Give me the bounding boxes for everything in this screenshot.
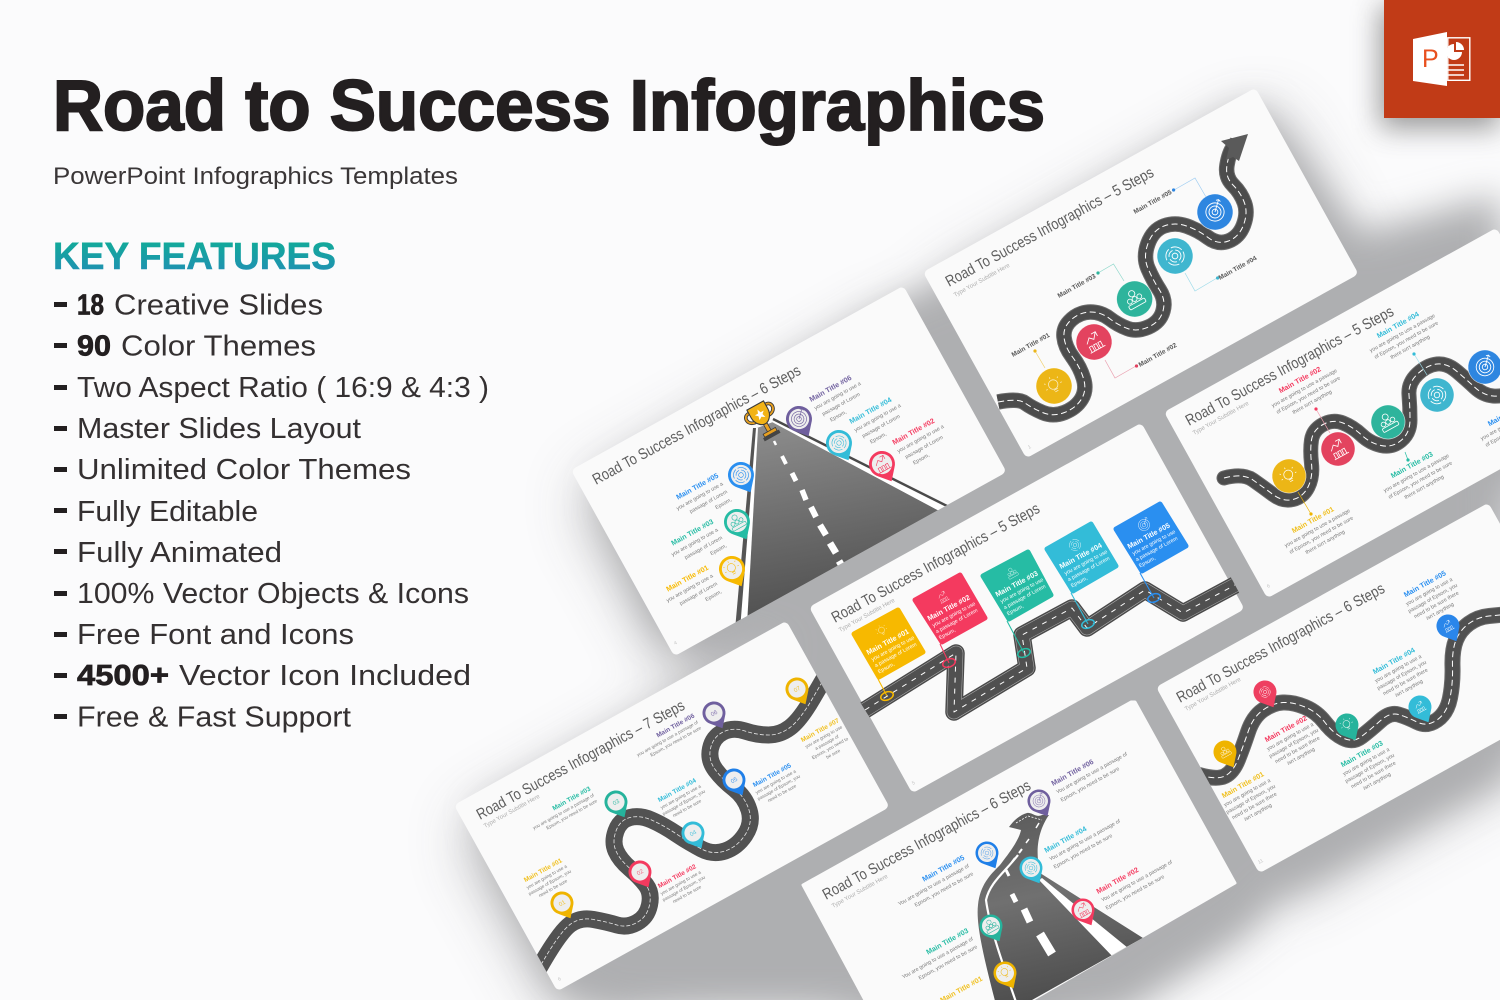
page number: 6 (557, 976, 563, 983)
connectors and labels: Main Title #01 (1011, 332, 1051, 359)
labels: Epsom, (829, 410, 848, 423)
panel: slide 5 steps road with circles (1164, 228, 1500, 598)
connectors and labels: Main Title #02 (1138, 342, 1178, 369)
labels: you are going to use a passage (1369, 313, 1436, 354)
labels (1216, 566, 1466, 829)
labels: Main Title #05 (674, 471, 720, 502)
labels (521, 712, 853, 908)
page number: 4 (673, 640, 679, 647)
labels: Main Title #03 (669, 517, 715, 548)
card text: Epsum, (1070, 576, 1089, 589)
step circles (1266, 344, 1500, 499)
labels: you are going to use a (1266, 722, 1315, 752)
labels: Main Title #04 (848, 395, 893, 426)
key features list: Fully Editable (77, 496, 258, 528)
numbered pins: 06 (710, 709, 720, 718)
step circles (1030, 188, 1239, 410)
labels: you are going to use a (676, 481, 724, 512)
page number: 6 (1266, 583, 1272, 590)
labels: need to be sure there (1350, 760, 1397, 790)
slide title: Road To Success Infographics – 5 Steps (943, 164, 1157, 291)
labels: You are going to use a passage of (897, 863, 971, 908)
page number: 1 (1027, 444, 1033, 451)
key features list: Fully Animated (77, 537, 282, 569)
connectors and labels: Main Title #05 (1133, 189, 1173, 216)
labels: Main Title #01 (1220, 769, 1266, 800)
labels: of Epsom, you need to be sure (1388, 460, 1454, 501)
card text: you are going to use (1064, 549, 1109, 577)
labels: Main Title #03 (551, 785, 592, 812)
panel: slide 7 steps curvy road (454, 621, 890, 991)
labels: Epsom, (704, 589, 723, 603)
page number: 11 (1257, 858, 1265, 866)
labels: You are going to use a passage of (1055, 751, 1129, 796)
labels (891, 741, 1178, 1000)
card text: Main Title #05 (1126, 521, 1171, 551)
key features list: Free Font and Icons (77, 619, 354, 651)
key features list: Master Slides Layout (77, 413, 361, 445)
labels: of Epsom, you need to be sure (1289, 515, 1355, 556)
labels: you are going to use a (660, 783, 702, 810)
labels: there isn't anything (1390, 334, 1431, 361)
labels: passage of Lorem (684, 535, 724, 561)
connectors and labels: Main Title #03 (1057, 273, 1097, 300)
key features list: Creative Slides (114, 290, 323, 322)
labels: passage of Lorem (861, 413, 902, 440)
labels (1265, 303, 1500, 563)
labels: Main Title #01 (664, 563, 710, 594)
labels: Main Title #06 (655, 712, 696, 739)
winding road (1224, 364, 1500, 500)
card text (865, 520, 1183, 676)
card text: a passage of Lorem (1135, 536, 1179, 563)
slide title: Road To Success Infographics – 6 Steps (820, 777, 1034, 904)
labels: Main Title #03 (1339, 738, 1385, 769)
labels: Epsom, you need to be sure (1053, 833, 1114, 870)
labels: Main Title #01 (1290, 504, 1336, 535)
labels: Epsom, (714, 497, 733, 511)
labels: you are going to use a (755, 768, 797, 795)
labels: there isn't anything (1292, 389, 1333, 416)
labels: you are going to use a (1342, 747, 1391, 777)
labels: need to be sure (672, 884, 703, 904)
labels: there isn't anything (1305, 529, 1346, 556)
card text: Epsum, (1138, 556, 1157, 569)
numbered pins: 05 (730, 776, 740, 785)
connectors and road markers (878, 573, 1161, 702)
card text: a passage of Lorem (1067, 556, 1111, 583)
labels: isn't anything (1286, 747, 1316, 767)
labels: isn't anything (1362, 772, 1392, 792)
numbered pins: 01 (558, 899, 568, 908)
labels: you are going to use a passage (1284, 508, 1351, 549)
labels: Epsom, (912, 453, 931, 466)
key features list: 90 (77, 331, 111, 363)
labels: need to be sure (672, 798, 703, 818)
labels: Epsom, you need to be sure (918, 944, 979, 982)
connectors and labels (1011, 178, 1258, 378)
pins (971, 785, 1102, 994)
labels: isn't anything (1394, 679, 1424, 699)
labels: you are going to use a passage (1383, 453, 1450, 494)
main title: Road to Success Infographics (53, 67, 1045, 146)
slide subtitle: Type Your Subtitle Here (953, 263, 1012, 299)
labels: passage of Epsom, you (528, 868, 572, 896)
key features list: 100% Vector Objects & Icons (77, 578, 469, 610)
icon: PowerPoint logo: P (1422, 45, 1439, 73)
panel: slide 6 steps road with filled pins (1156, 503, 1500, 873)
labels: you are going to use a (526, 863, 568, 890)
panel: slide 5 steps winding road with arrow (923, 88, 1359, 458)
numbered pins (546, 673, 816, 924)
labels: Main Title #05 (752, 762, 793, 789)
slide title: Road To Success Infographics – 6 Steps (590, 362, 804, 489)
labels: you are going to use a (660, 869, 702, 896)
labels: passage of Lorem (689, 489, 729, 515)
slide subtitle: Type Your Subtitle Here (838, 598, 897, 634)
labels: Epsom, you need to be sure (649, 725, 702, 758)
labels: Main Title #06 (1050, 757, 1095, 788)
labels: Main Title #02 (891, 416, 936, 447)
labels: passage of Lorem (904, 434, 945, 461)
card text: you are going to use (1132, 529, 1177, 557)
labels: Epsom, you need to be sure (1060, 766, 1121, 803)
labels: you are going to use a (671, 527, 719, 558)
labels (660, 370, 954, 620)
slide title: Road To Success Infographics – 5 Steps (1183, 303, 1397, 430)
PowerPoint badge shadow (1380, 6, 1500, 128)
labels: You are going to use a passage of (1100, 859, 1174, 904)
zigzag road (865, 585, 1235, 712)
labels: you are going to use a (813, 381, 862, 412)
labels: be sure (825, 748, 841, 760)
card text: Main Title #03 (994, 569, 1039, 599)
labels: you are going to use a (1374, 654, 1423, 684)
labels: passage of Epsom, you (1407, 583, 1459, 615)
labels: you are going to use a (1405, 577, 1454, 607)
labels: need to be sure (767, 783, 798, 803)
labels: there isn't anything (1404, 474, 1445, 501)
numbered pins: 02 (636, 868, 646, 877)
page number: 5 (911, 780, 917, 787)
key features heading: KEY FEATURES (53, 236, 336, 278)
slide subtitle: Type Your Subtitle Here (483, 794, 542, 830)
panel: slide 6 steps perspective road (803, 702, 1235, 1000)
connectors (1298, 352, 1427, 516)
key features list: Color Themes (121, 331, 316, 363)
slide subtitle: Type Your Subtitle Here (1192, 401, 1251, 437)
PowerPoint badge (1384, 0, 1500, 118)
slide shadows (466, 114, 1500, 1000)
card text: a passage of Lorem (1003, 584, 1047, 611)
labels: passage of Epsom, you (757, 773, 801, 801)
card text: Epsum, (1006, 604, 1025, 617)
labels: you are going to use a (1223, 778, 1272, 808)
icon: trophy (742, 398, 786, 444)
pins (714, 401, 903, 593)
labels: Main Title #04 (1043, 824, 1088, 855)
labels: Epsom, (869, 432, 888, 445)
labels: you are going to use (804, 724, 843, 749)
perspective road (978, 812, 1143, 1000)
key features list: Unlimited Color Themes (77, 454, 411, 486)
key features list: 4500+ (77, 660, 169, 692)
labels: Main Title #04 (657, 777, 698, 804)
key features list: Two Aspect Ratio ( 16:9 & 4:3 ) (77, 372, 489, 404)
labels: need to be sure there (1231, 791, 1278, 821)
labels: Epsom, you need to be sure (1105, 874, 1166, 911)
slide subtitle: Type Your Subtitle Here (831, 874, 890, 910)
labels: Main Title #04 (1375, 309, 1421, 340)
labels: Main Title #06 (808, 373, 853, 404)
labels: You are going to use a passage of (1048, 818, 1122, 863)
labels: passage of Epsom, you (1376, 660, 1428, 692)
labels: passage of Epsom, you (1344, 753, 1396, 785)
key features list: Free & Fast Support (77, 702, 351, 734)
labels: Main Title #05 (1402, 568, 1448, 599)
labels: need to be sure there (1274, 735, 1321, 765)
labels: you are going to use a passage of (636, 719, 700, 758)
labels: Main Title #04 (1371, 645, 1417, 676)
labels: you are going to use a passage (1271, 368, 1338, 409)
labels: Epsom, you need to be sure (914, 871, 975, 909)
subtitle: PowerPoint Infographics Templates (53, 163, 458, 190)
filled pins (1209, 610, 1467, 773)
labels: Main Title #02 (1263, 713, 1309, 744)
labels: isn't anything (1243, 803, 1273, 823)
labels: a passage of (814, 734, 840, 751)
labels: of Epsom, you need to be sure (1276, 375, 1342, 416)
slide title: Road To Success Infographics – 6 Steps (1174, 580, 1388, 707)
card text: you are going to use (932, 601, 977, 629)
key features list (54, 290, 489, 734)
card text: Epsum, (877, 662, 896, 675)
labels: Epsom, (709, 543, 728, 557)
connectors and labels: Main Title #04 (1218, 255, 1258, 282)
labels: Main Title #01 (523, 857, 564, 884)
labels: Main Title #02 (1095, 865, 1140, 896)
labels: Main Title #07 (800, 717, 841, 744)
labels: passage of Epsom, you (662, 788, 706, 816)
labels: you are going to use a (896, 424, 945, 455)
labels: of Epsom, you need to be sure (1374, 320, 1440, 361)
card text: Main Title #01 (865, 627, 910, 657)
labels: passage of Lorem (821, 391, 862, 418)
numbered pins: 04 (689, 829, 699, 838)
labels: you are going to use a passage of (532, 792, 596, 831)
card text: Main Title #04 (1058, 541, 1103, 571)
numbered pins: 07 (793, 685, 803, 694)
card text: Main Title #02 (926, 593, 971, 623)
labels: need to be sure there (1382, 667, 1429, 697)
labels: passage of Epsom, you (1268, 728, 1320, 760)
card icons (874, 517, 1152, 637)
shadow backing between slides (480, 105, 1500, 1000)
labels: Main Title #03 (1389, 449, 1435, 480)
labels: Main Title #02 (1277, 364, 1323, 395)
card text: a passage of Lorem (935, 608, 979, 635)
curvy road (535, 660, 835, 975)
labels: passage of Lorem (679, 581, 719, 607)
labels: isn't anything (1425, 602, 1455, 622)
labels: You are going to use a passage of (901, 936, 975, 981)
road with arrow (998, 134, 1248, 415)
slide title: Road To Success Infographics – 5 Steps (829, 500, 1043, 627)
labels: Epsom, you need to (811, 736, 849, 760)
panel: slide 5 steps zigzag road with cards (809, 423, 1245, 793)
winding road (1190, 612, 1500, 778)
labels: Epsom, you need to be sure (545, 798, 598, 831)
panel: slide 6 steps straight road with trophy (571, 286, 1007, 656)
slide title: Road To Success Infographics – 7 Steps (474, 697, 688, 824)
labels: you are going to use a (853, 403, 902, 434)
cards (854, 504, 1186, 677)
labels: you are going to use a (666, 573, 714, 604)
labels: Main Title #03 (924, 926, 970, 957)
slide subtitle: Type Your Subtitle Here (1184, 677, 1243, 713)
key features list: Vector Icon Included (179, 660, 471, 692)
labels: passage of Epsom, you (662, 874, 706, 902)
card text: Epsum, (938, 628, 957, 641)
labels: need to be sure (538, 878, 569, 898)
labels: Main Title #05 (920, 853, 966, 884)
labels: need to be sure there (1413, 590, 1460, 620)
numbered pins: 03 (612, 798, 622, 807)
labels: passage of Epsom, you (1225, 784, 1277, 816)
labels: Main Title #02 (657, 863, 698, 890)
card text: you are going to use (1000, 577, 1045, 605)
straight road (736, 418, 948, 622)
card text: a passage of Lorem (874, 642, 918, 669)
card text: you are going to use (871, 635, 916, 663)
key features list: 18 (77, 290, 104, 322)
